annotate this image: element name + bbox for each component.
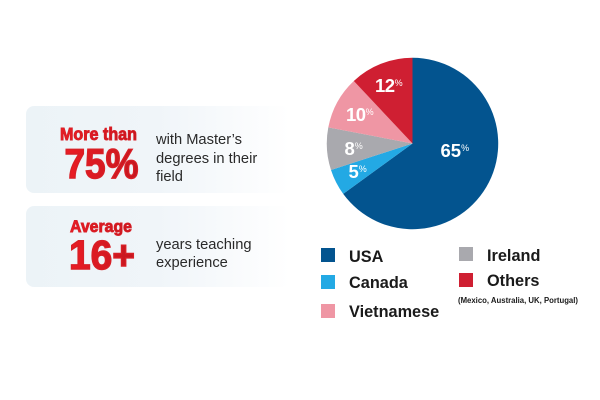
panel background — [26, 106, 290, 193]
text: masters description: field — [156, 169, 183, 185]
heading: more than: More than — [60, 124, 137, 144]
legend item: Ireland — [459, 247, 540, 265]
slice: Canada 5% — [331, 144, 412, 194]
heading: average: Average — [70, 217, 132, 236]
legend item: Canada: Canada — [349, 274, 409, 292]
panel: teaching experience — [26, 206, 290, 287]
legend item: USA — [321, 248, 384, 266]
pie labels — [344, 75, 469, 182]
slice: Ireland 8% — [327, 127, 412, 170]
pie labels: 8 — [344, 138, 355, 159]
pie labels: % — [461, 143, 469, 153]
slice: USA 65% — [343, 58, 498, 229]
legend item: Others: Others — [487, 272, 539, 290]
text: experience description: years teaching — [156, 237, 252, 253]
pie labels: 10 — [346, 104, 366, 125]
text: masters description: degrees in their — [156, 151, 257, 167]
text: experience description — [156, 237, 252, 271]
pie labels: 65 — [440, 140, 461, 161]
stat: 75%: 75% — [64, 140, 138, 187]
stat: 16+: 16+ — [69, 232, 135, 278]
text: masters description: with Master’s — [155, 132, 242, 148]
legend item: Others — [459, 272, 539, 290]
panel: masters degrees — [26, 106, 290, 193]
text: experience description: experience — [156, 255, 228, 271]
slice: Vietnamese 10% — [328, 81, 412, 144]
pie labels: % — [359, 164, 367, 174]
slice: Others 12% — [354, 58, 412, 144]
legend item: Ireland: Ireland — [487, 247, 540, 265]
pie labels: 12 — [375, 75, 395, 96]
legend item: Canada — [321, 274, 409, 292]
legend item: USA: USA — [349, 248, 384, 266]
pie chart — [327, 58, 498, 229]
pie labels: % — [366, 107, 374, 117]
text: masters description — [155, 132, 257, 185]
legend note: others countries: (Mexico, Australia, UK, Portugal) — [458, 296, 578, 305]
pie labels: % — [395, 78, 403, 88]
pie labels: 5 — [348, 161, 359, 182]
panel background — [26, 206, 290, 287]
legend — [321, 247, 578, 321]
pie labels: % — [355, 141, 363, 151]
legend item: Vietnamese: Vietnamese — [349, 303, 439, 321]
